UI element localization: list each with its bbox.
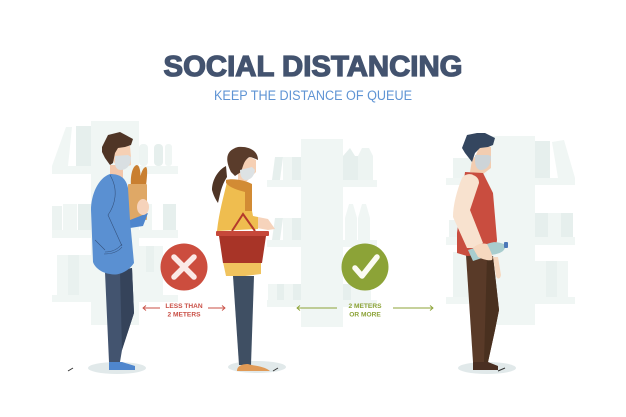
icon: paper bag <box>128 184 147 220</box>
arrow: red right <box>208 306 225 310</box>
label: less than 2 meters: 2 METERS <box>168 312 201 318</box>
label: 2 meters or more: OR MORE <box>349 312 381 318</box>
background: shelf left <box>52 121 178 325</box>
background: shelf middle <box>267 139 377 327</box>
arrow: green right <box>393 306 433 310</box>
arrow: red left <box>143 306 160 310</box>
title: SOCIAL DISTANCING <box>164 51 462 83</box>
icon: water bottle <box>468 242 508 261</box>
person: man with water bottle <box>453 133 516 374</box>
ponytail <box>212 166 227 203</box>
background: shelf right <box>446 136 575 325</box>
icon: red cross circle <box>160 244 208 290</box>
label: 2 meters or more: 2 METERS <box>349 303 382 310</box>
subtitle: KEEP THE DISTANCE OF QUEUE <box>214 88 412 103</box>
arrow: green left <box>297 306 337 310</box>
label: less than 2 meters <box>165 303 203 318</box>
person: man with bread bag <box>68 132 149 374</box>
label: less than 2 meters: LESS THAN <box>165 303 203 310</box>
icon: baguette <box>131 165 147 186</box>
label: 2 meters or more <box>349 303 382 318</box>
icon: shopping basket <box>216 214 269 263</box>
person: woman with basket <box>212 147 286 373</box>
icon: green check circle <box>342 244 388 290</box>
